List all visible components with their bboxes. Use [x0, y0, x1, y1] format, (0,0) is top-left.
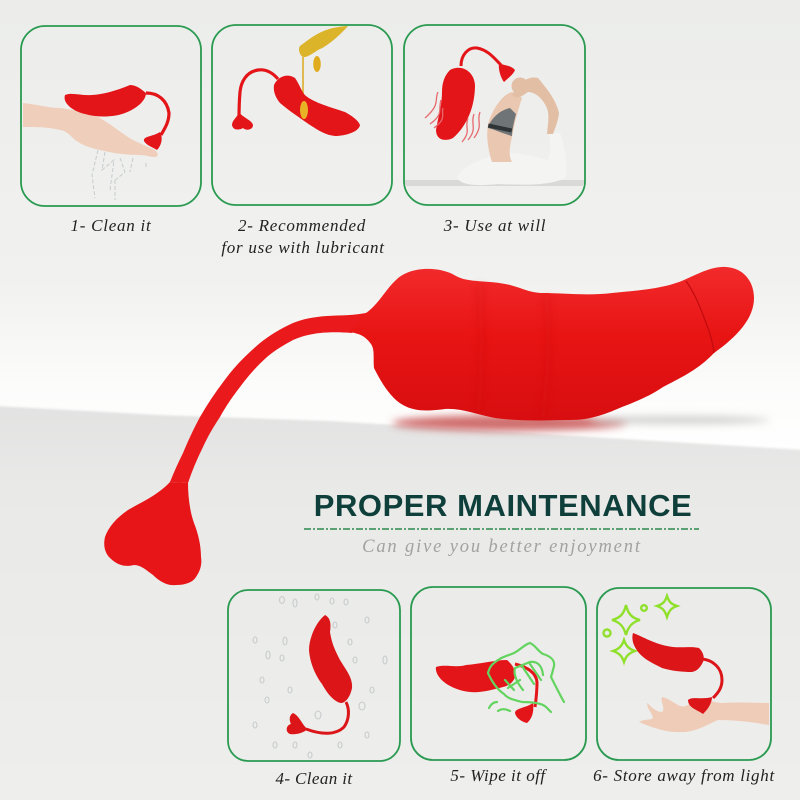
product body	[348, 267, 754, 420]
product	[436, 68, 475, 140]
heart charm	[232, 112, 253, 130]
sparkles	[604, 596, 677, 662]
heading rule	[304, 528, 699, 530]
caption 2: for use with lubricant	[221, 238, 385, 257]
table surface	[0, 406, 800, 800]
product tail	[702, 659, 722, 698]
product	[274, 76, 360, 136]
mat	[405, 180, 584, 186]
green wiping hand	[488, 643, 564, 712]
head	[512, 78, 528, 94]
tip seam	[686, 281, 714, 353]
product on hand	[65, 85, 146, 117]
heart charm	[287, 713, 308, 734]
panel: step 4 clean	[228, 590, 400, 761]
water stream	[92, 150, 146, 200]
legs	[457, 133, 566, 185]
panel: step 1 clean	[21, 26, 201, 206]
heart charm	[499, 63, 515, 82]
panel: step 3 use at will	[404, 25, 585, 205]
product tail	[170, 312, 370, 483]
caption 2: 2- Recommended	[238, 216, 366, 235]
oil drop	[313, 56, 321, 72]
panel: step 5 wipe	[411, 587, 586, 760]
product heart charm	[104, 482, 201, 585]
caption 2	[221, 216, 385, 257]
oil stream	[302, 57, 304, 104]
product tail	[461, 48, 501, 66]
oil dropper	[299, 26, 348, 57]
caption 6: 6- Store away from light	[593, 766, 775, 785]
heart charm	[688, 697, 712, 714]
body seam shading	[478, 285, 548, 418]
caption 4: 4- Clean it	[275, 769, 353, 788]
product shadow	[392, 415, 770, 431]
arms	[512, 78, 559, 134]
subheading: Can give you better enjoyment	[362, 537, 642, 557]
panel: step 2 lubricant	[212, 25, 392, 205]
product tail	[515, 664, 537, 707]
product	[632, 633, 704, 672]
torso	[487, 92, 522, 162]
product tail	[239, 70, 278, 120]
oil drop on product	[300, 101, 308, 119]
top	[488, 108, 516, 136]
heart charm	[515, 703, 533, 723]
caption 1: 1- Clean it	[71, 216, 152, 235]
panel: step 6 store	[597, 588, 771, 760]
product	[436, 660, 515, 692]
water droplets	[253, 594, 387, 758]
heading: PROPER MAINTENANCE	[314, 488, 692, 523]
vibration lines	[425, 92, 480, 142]
product	[309, 615, 352, 703]
background wall	[0, 0, 800, 455]
caption 3: 3- Use at will	[443, 216, 546, 235]
hand	[639, 697, 769, 732]
main product illustration	[104, 267, 754, 585]
caption 5: 5- Wipe it off	[450, 766, 547, 785]
tail and heart	[146, 93, 169, 135]
hand	[23, 103, 158, 157]
product tail	[306, 702, 348, 733]
wipe marks	[489, 702, 510, 711]
